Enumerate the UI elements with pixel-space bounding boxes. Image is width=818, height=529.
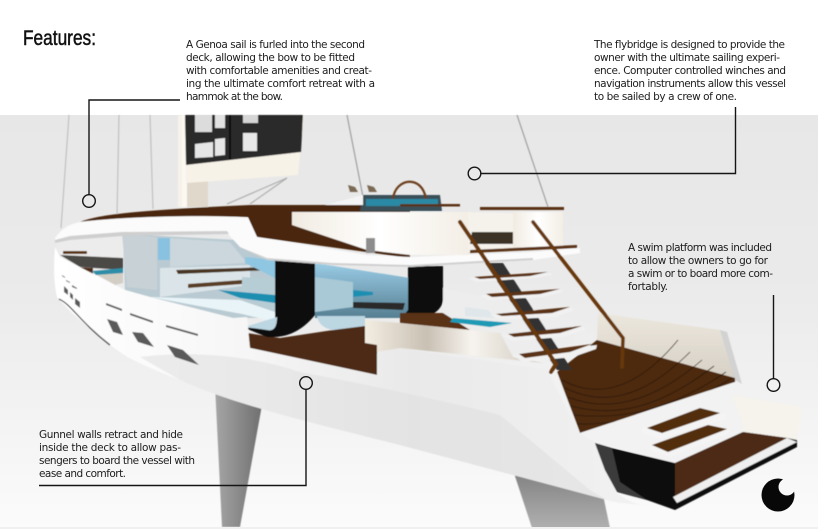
aft teak deck [557, 340, 735, 433]
text block: Genoa sail: hammok at the bow. [186, 91, 283, 103]
callout: flybridge leader [468, 107, 736, 180]
flybridge opening [470, 232, 513, 244]
lounge base [365, 320, 543, 363]
swim platform [595, 395, 802, 510]
cabin sofa aqua [315, 277, 405, 312]
hull lower shading [140, 354, 607, 500]
aft side wall [597, 313, 735, 378]
illustration: yacht cutaway [54, 115, 802, 528]
hull windows [62, 275, 199, 365]
text block: swim platform: fortably. [628, 281, 668, 293]
text block: gunnel walls: ease and comfort. [39, 468, 126, 480]
flybridge middle [468, 212, 513, 252]
callout: swim platform leader [767, 295, 780, 391]
teak strip below console [470, 245, 577, 253]
black pillar front [245, 260, 315, 337]
text block: flybridge: ence. Computer controlled winches and [594, 65, 786, 77]
callout: gunnel walls leader [39, 377, 312, 486]
aft wall edge [720, 330, 742, 384]
text block: gunnel walls: sengers to board the vessel with [39, 455, 195, 467]
flybridge console left [292, 212, 468, 255]
heading: Features: Features: [23, 27, 96, 50]
transom [547, 370, 743, 463]
bow cockpit opening [55, 234, 123, 292]
text block: Genoa sail: deck, allowing the bow to be fitted [186, 52, 355, 64]
stair handrails [460, 222, 623, 372]
bottom edge strip [0, 527, 818, 529]
upper teak deck [80, 205, 410, 258]
lounge rear wall [443, 288, 575, 357]
lower teak deck [247, 322, 377, 375]
hull [54, 247, 650, 505]
text block: Genoa sail [186, 39, 375, 103]
icon: moon logo [762, 478, 796, 512]
keel fin [215, 385, 262, 527]
lounge cushion [450, 318, 512, 327]
text block: flybridge: owner with the ultimate sailing experi- [594, 52, 780, 64]
text block: gunnel walls: Gunnel walls retract and hide [39, 429, 183, 441]
text block: flybridge: The flybridge is designed to provide the [593, 39, 785, 51]
mast and sail panel [178, 115, 304, 207]
text block: swim platform [628, 242, 773, 293]
text block: swim platform: A swim platform was included [628, 242, 772, 254]
text block: flybridge: navigation instruments allow this vessel [594, 78, 786, 90]
text block: swim platform: a swim or to board more com- [628, 268, 773, 280]
flybridge console right [513, 212, 563, 250]
text block: gunnel walls: inside the deck to allow pas- [39, 442, 181, 454]
main cabin interior [122, 234, 275, 322]
rigging lines [61, 115, 548, 238]
text block: Genoa sail: with comfortable amenities and creat- [186, 65, 372, 77]
stair treads [468, 272, 597, 362]
text block: swim platform: to allow the owners to go for [628, 255, 769, 267]
text block: flybridge [593, 39, 786, 103]
swim platform steps [642, 408, 730, 457]
glass skirt walls [245, 316, 365, 330]
callout: Genoa sail leader [83, 100, 180, 207]
text block: Genoa sail: A Genoa sail is furled into the second [186, 39, 365, 51]
bow keel shadow line [59, 299, 110, 345]
lounge teak [400, 313, 470, 330]
lounge bench [465, 307, 495, 318]
text block: flybridge: to be sailed by a crew of one. [594, 91, 737, 103]
text block: gunnel walls [39, 429, 195, 480]
upper deck band [55, 216, 580, 267]
cabin glass section [315, 263, 410, 318]
black pillar rear [400, 266, 443, 320]
background panel [0, 115, 818, 527]
upper deck band shade [55, 231, 533, 267]
stair stringer [485, 263, 572, 370]
flybridge helm [325, 182, 564, 211]
text block: Genoa sail: ing the ultimate comfort retreat with a [186, 78, 375, 90]
shackle [366, 238, 375, 253]
rudder fin [513, 470, 610, 528]
